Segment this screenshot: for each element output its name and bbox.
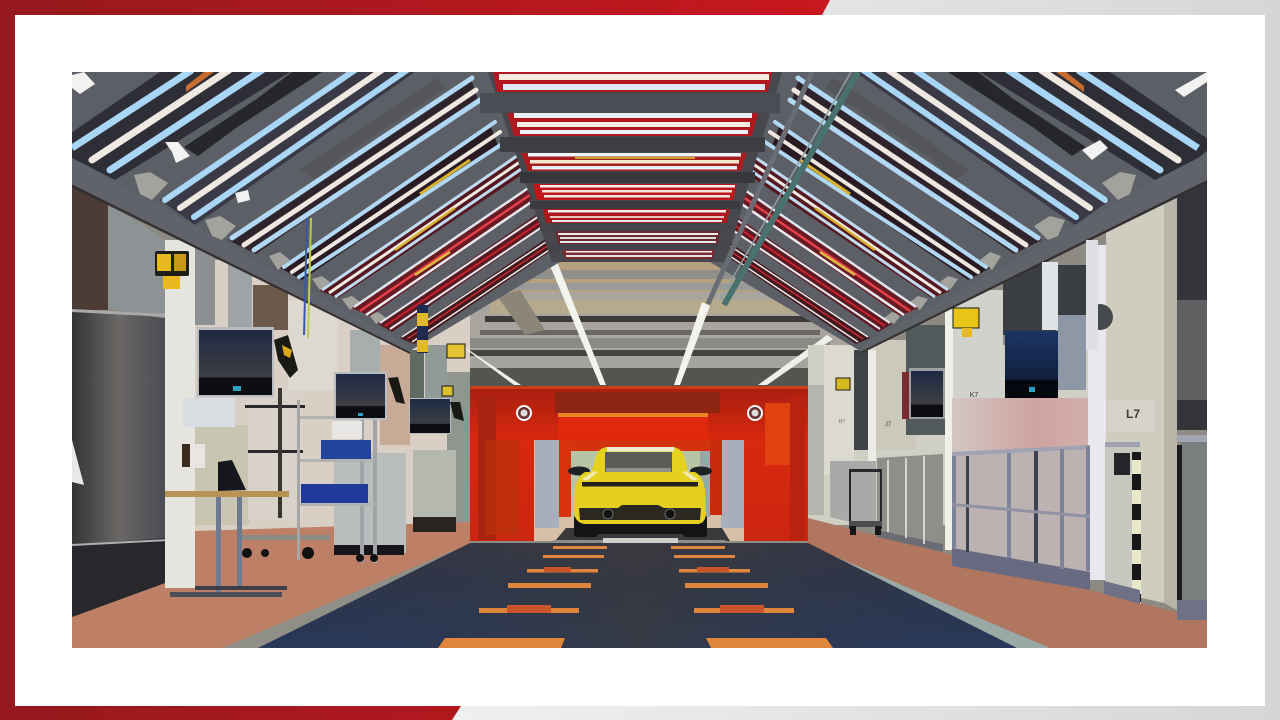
yellow lamp right — [953, 308, 979, 337]
car body — [574, 472, 706, 524]
engine grille — [606, 468, 671, 472]
monitor left 3 — [409, 398, 451, 434]
left wall — [160, 250, 470, 540]
floor right — [808, 518, 1207, 648]
tent inner opening — [534, 440, 744, 543]
red tent curtain — [470, 386, 808, 541]
cart wheel frame right — [849, 469, 882, 535]
centre light panel 6 — [555, 231, 720, 244]
centre light panel 4 — [533, 184, 737, 200]
light bundle 4 — [280, 122, 505, 280]
right wall — [808, 262, 1098, 550]
yellow lamp left — [155, 251, 189, 289]
grey cabinets — [334, 450, 456, 555]
centre light panel 2 — [507, 113, 758, 136]
dangling yellow tools left — [274, 335, 464, 421]
back hall services — [470, 262, 850, 386]
light bundle 1 — [55, 70, 290, 180]
wall zone labels — [839, 392, 1140, 428]
centre light panel 5 — [543, 209, 730, 223]
cart rack — [240, 388, 330, 559]
yellow sports car — [568, 447, 712, 537]
left ceiling slope — [55, 70, 560, 354]
light bundle 7 — [378, 212, 545, 332]
tail light bar — [582, 482, 698, 486]
exhausts — [603, 509, 675, 519]
right pillar — [1088, 175, 1177, 610]
yellow lamp small left — [442, 344, 465, 396]
frame: grey corner bars — [450, 0, 1280, 720]
cabin — [591, 447, 689, 474]
light bundle 5 — [320, 147, 530, 298]
rear window — [605, 452, 672, 472]
right wall pipe fittings — [1042, 240, 1113, 350]
right ceiling slope — [710, 70, 1215, 354]
beam brackets — [134, 172, 386, 324]
grey railing panels mid right — [830, 454, 943, 552]
roof stripe — [607, 447, 674, 452]
light bundle 3 — [228, 76, 480, 254]
hall light strips — [459, 254, 833, 385]
white body highlights — [582, 471, 698, 481]
centre light panel 1 — [493, 72, 772, 92]
monitor right large — [1005, 331, 1058, 398]
centre light panel 7 — [562, 250, 715, 259]
grey-blue railing panels right — [952, 445, 1090, 590]
lower ceiling beam — [55, 148, 410, 354]
beam underside edge — [55, 176, 410, 354]
tent warning sign right — [747, 405, 763, 421]
teal ceiling ducts — [708, 72, 858, 305]
right dark bay — [1177, 165, 1207, 620]
monitor left 1 — [197, 327, 274, 397]
light bundle 2 — [160, 70, 415, 225]
dark tunnel floor — [258, 543, 1017, 648]
yellow-green hanging cable — [304, 218, 311, 338]
service trolley with blue crates — [297, 400, 378, 563]
orange floor markers — [438, 546, 833, 648]
wall zone labels: J7 — [885, 422, 892, 428]
standing table with phone — [165, 398, 289, 597]
car wheels — [574, 515, 707, 537]
left metal column — [72, 185, 166, 617]
top-corner lamps — [72, 72, 1207, 203]
roof gaps between bundles — [184, 72, 446, 180]
lower bumper — [579, 505, 701, 520]
centre ceiling — [480, 72, 782, 262]
light bundle 8 — [400, 236, 555, 344]
side mirrors — [568, 466, 712, 476]
tent warning sign left — [516, 405, 532, 421]
wall zone labels: H7 — [839, 419, 845, 425]
wall zone labels: K7 — [970, 392, 978, 399]
centre light panel 3 — [521, 153, 747, 171]
yellow blue post — [417, 305, 428, 353]
floor left — [72, 522, 470, 648]
yellow lamp far right — [836, 378, 850, 390]
white wall pillar — [165, 240, 195, 588]
wall zone labels: L7 — [1126, 407, 1140, 421]
black and white hazard post and phone — [1104, 442, 1141, 604]
light bundle 6 — [352, 180, 540, 316]
frame: red corner bars — [0, 0, 830, 720]
monitor left 2 — [334, 372, 387, 420]
photo: car in inspection tunnel — [55, 70, 1215, 648]
monitor right small — [902, 368, 945, 419]
